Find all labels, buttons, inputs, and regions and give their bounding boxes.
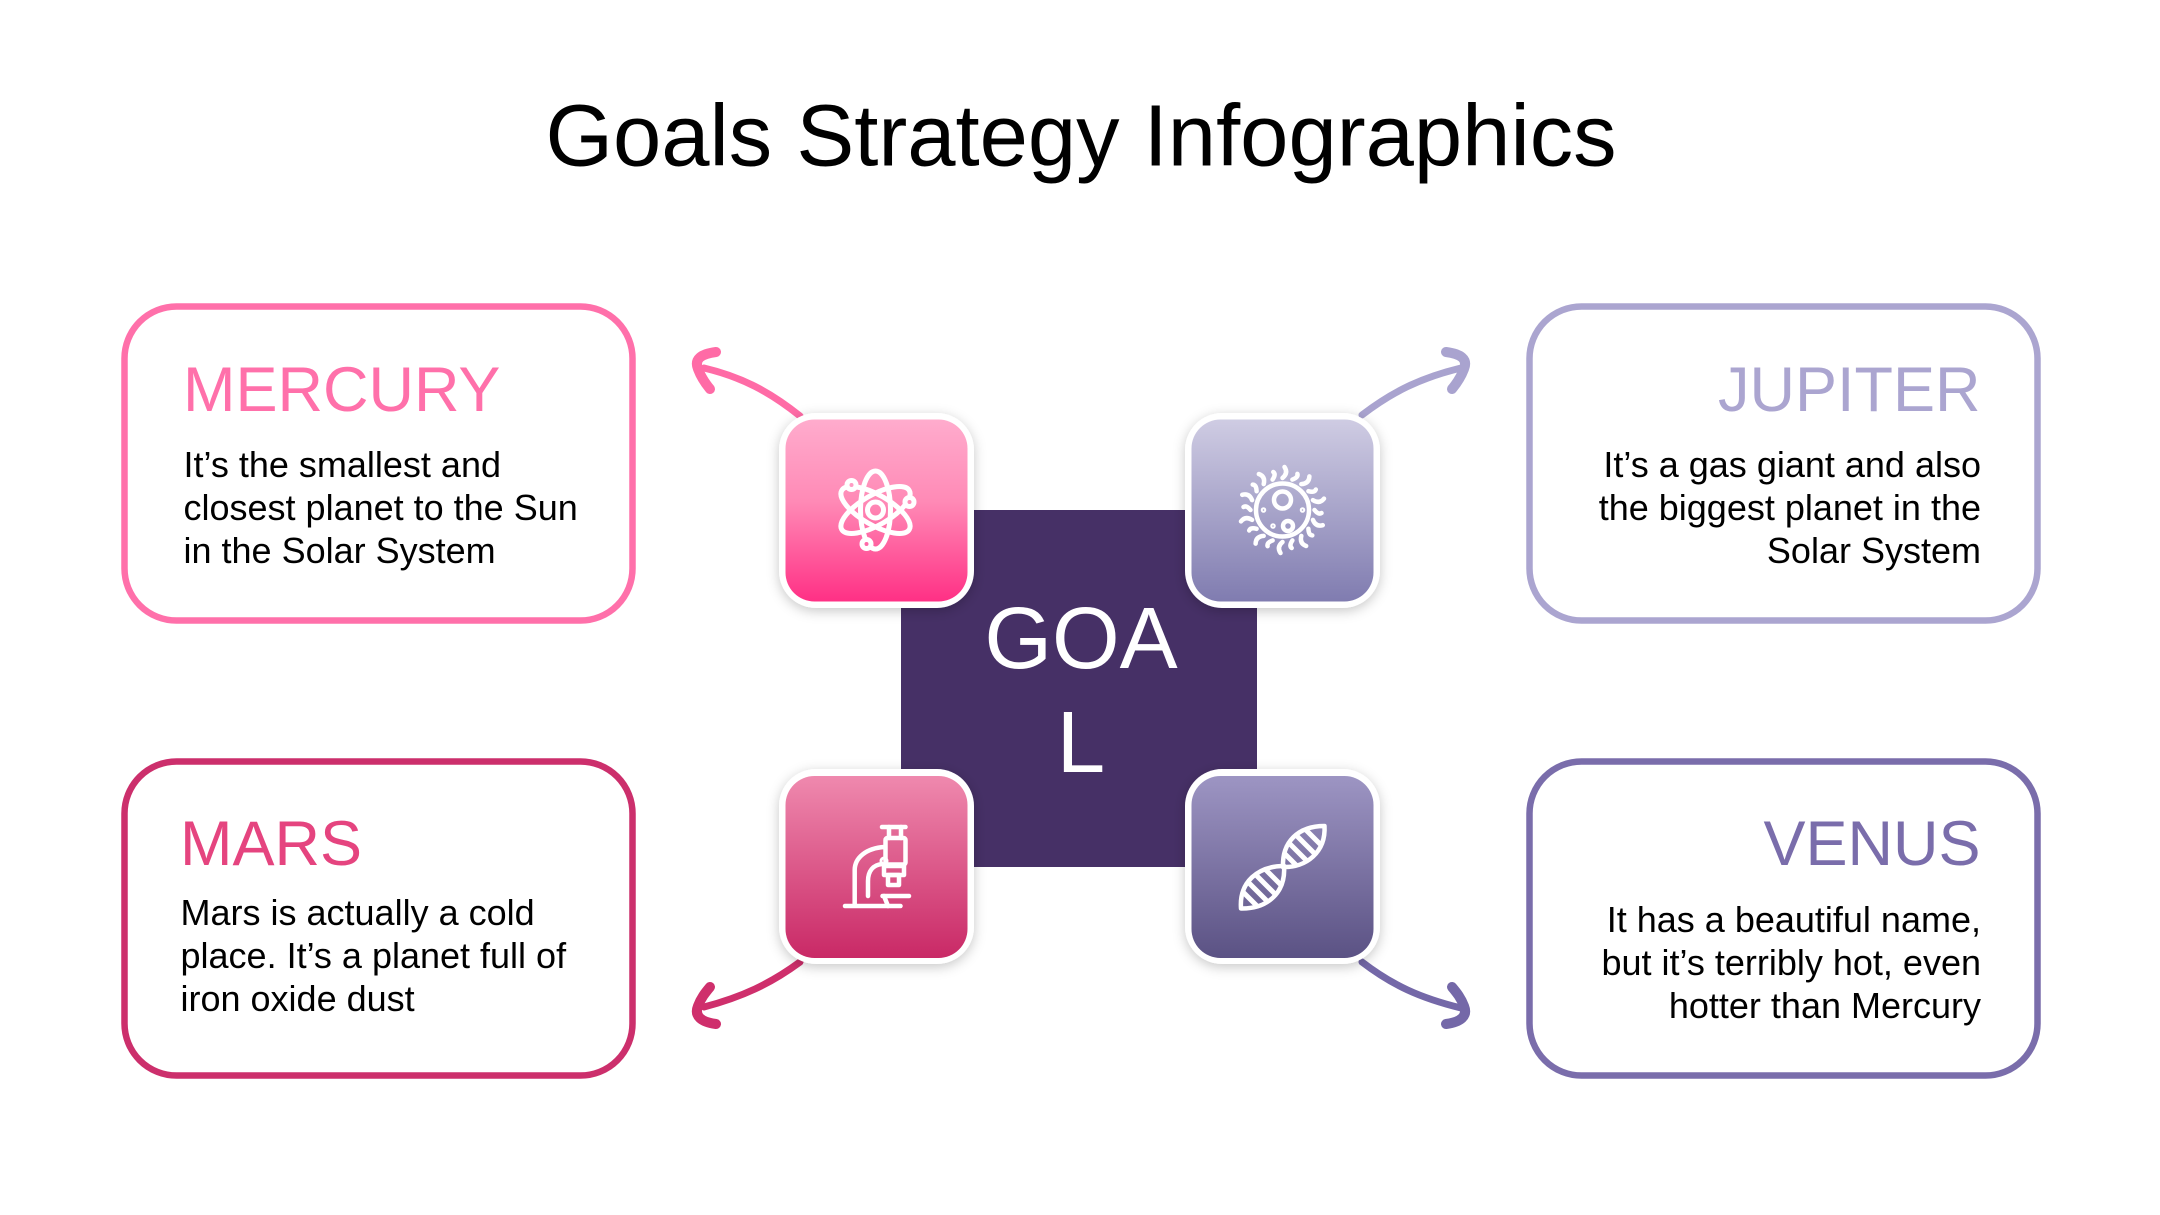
text: Venus description: but it’s terribly hot, even [1601,942,1981,983]
icon: microscope [845,827,909,906]
panel: Mercury [124,306,632,620]
tile: bacterium [1185,413,1380,608]
arrow: to Jupiter [1362,352,1465,415]
panel: Jupiter [1530,306,2038,620]
text: Venus description: It has a beautiful name, [1607,899,1981,940]
heading: Mars: MARS [180,809,362,879]
icon: DNA helix [1238,824,1327,911]
heading: Venus: VENUS [1763,809,1980,879]
panel: Mars [124,762,632,1076]
tile: microscope [779,769,974,964]
text: Mars description: Mars is actually a cold [180,892,535,933]
icon: bacterium [1240,467,1325,553]
tile: DNA [1185,769,1380,964]
icon: atom [834,471,917,549]
text: Mars description: iron oxide dust [180,978,415,1019]
text: Jupiter description: the biggest planet in the [1599,487,1981,528]
heading: Jupiter: JUPITER [1718,355,1980,425]
arrow: to Mars [697,962,800,1024]
text: Mercury description: closest planet to the Sun [184,487,578,528]
text: Mars description: place. It’s a planet full of [180,935,567,976]
heading: Mercury: MERCURY [183,355,500,425]
arrow: to Mercury [697,352,800,416]
text: Venus description: hotter than Mercury [1669,985,1981,1026]
tile: atom [779,413,974,608]
title: Goals Strategy Infographics [545,88,1617,184]
text: Jupiter description: It’s a gas giant and also [1603,444,1981,485]
arrow: to Venus [1362,962,1465,1024]
text: Mercury description: in the Solar System [184,530,496,571]
center label: L [1057,694,1105,791]
text: Mercury description: It’s the smallest and [184,444,501,485]
panel: Venus [1530,762,2038,1076]
text: Jupiter description: Solar System [1767,530,1981,571]
center goal square [901,510,1257,867]
center label: GOA [984,590,1178,687]
